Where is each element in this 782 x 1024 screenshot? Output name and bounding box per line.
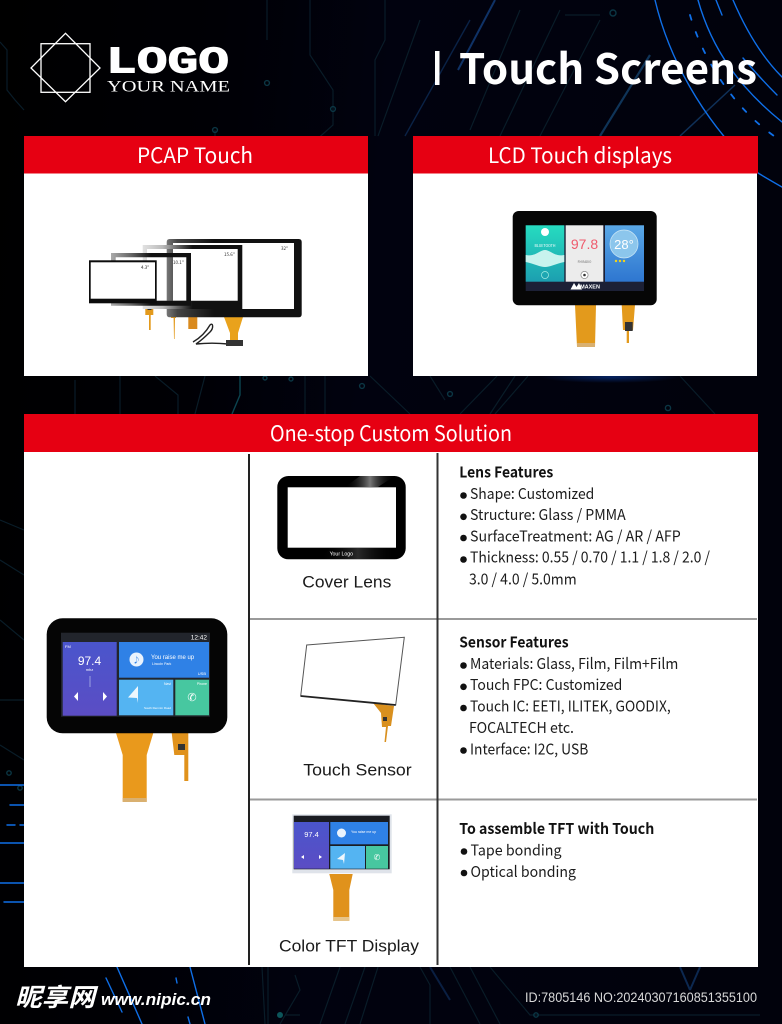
text block: Sensor Features: Touch IC: EETI, ILITEK, GOODIX, <box>470 696 671 717</box>
text block: Sensor Features: Sensor Features <box>459 631 569 652</box>
text block: Lens Features: 3.0 / 4.0 / 5.0mm <box>469 568 577 589</box>
image: touch display module: USB <box>198 671 206 676</box>
image: LCD module <box>513 211 657 347</box>
image: LCD module: FM RADIO <box>578 260 592 264</box>
watermark: nipic <box>15 978 211 1014</box>
text block: Sensor Features <box>459 631 678 759</box>
panel: PCAP Touch <box>24 136 368 376</box>
image: touch panels: 32" <box>281 246 288 252</box>
image: color TFT display: You raise me up <box>351 830 376 834</box>
watermark: nipic: www.nipic.cn <box>101 990 211 1009</box>
text block: Sensor Features: Interface: I2C, USB <box>470 738 588 759</box>
watermark: nipic: 昵享网 <box>15 978 99 1014</box>
image: touch display module <box>47 618 227 802</box>
image: touch display module: 97.4 <box>78 654 102 668</box>
panel: LCD Touch displays <box>413 136 758 376</box>
image: touch display module: FM <box>65 644 71 649</box>
label: Touch Sensor: Touch Sensor <box>303 761 412 780</box>
label: Cover Lens: Cover Lens <box>302 573 391 592</box>
image: touch display module: South Renmin Road <box>144 706 171 710</box>
image: cover lens: Your Logo <box>330 552 353 558</box>
text block: Lens Features <box>459 461 710 589</box>
image: touch display module: You raise me up <box>151 655 195 661</box>
image: LCD module: 28° <box>614 237 634 252</box>
image: LCD module: 97.8 <box>571 236 598 252</box>
label: Color TFT Display: Color TFT Display <box>279 937 420 956</box>
logo mark <box>31 33 100 102</box>
image: touch panels: 10.1" <box>173 260 184 266</box>
text block: assembly: To assemble TFT with Touch <box>459 818 654 839</box>
text block: Sensor Features: FOCALTECH etc. <box>469 717 574 738</box>
image: color TFT display <box>292 814 392 921</box>
title: Touch Screens <box>459 36 757 97</box>
text block: Lens Features: Lens Features <box>459 461 553 482</box>
logo word: LOGO <box>106 41 229 84</box>
text block: Lens Features: Shape: Customized <box>470 483 594 504</box>
text block: Lens Features: Thickness: 0.55 / 0.70 / 1.1 / 1.8 / 2.0 / <box>470 547 710 568</box>
image: touch panels: 15.6" <box>224 252 235 258</box>
image: color TFT display: ✆ <box>374 852 381 863</box>
image: touch display module: mhz <box>86 667 93 672</box>
image: touch display module: Phone <box>197 682 207 686</box>
logo name: YOUR NAME <box>107 78 230 96</box>
image: touch sensor <box>301 637 404 742</box>
text block: Sensor Features: Materials: Glass, Film, Film+Film <box>470 653 678 674</box>
heading: LCD Touch displays: LCD Touch displays <box>488 140 672 170</box>
image: color TFT display: 97.4 <box>304 830 319 839</box>
image: touch display module: ♪ <box>132 654 140 666</box>
logo <box>31 33 230 102</box>
image: touch display module: Lincoln Park <box>152 662 172 666</box>
image: touch display module: ✆ <box>187 689 197 705</box>
image: touch panels <box>89 239 302 346</box>
text block: Lens Features: Structure: Glass / PMMA <box>470 504 627 525</box>
text block: assembly <box>459 818 654 882</box>
heading: PCAP Touch: PCAP Touch <box>137 140 253 170</box>
panel: One-stop Custom Solution <box>24 414 758 967</box>
image id: ID:7805146 NO:20240307160851355100 <box>525 989 757 1005</box>
text block: Lens Features: SurfaceTreatment: AG / AR / AFP <box>470 526 681 547</box>
image: touch display module: Navi <box>164 682 171 686</box>
text block: assembly: Optical bonding <box>470 861 576 882</box>
image: touch display module: 12:42 <box>191 634 207 642</box>
heading: One-stop Custom Solution: One-stop Custom Solution <box>270 418 512 448</box>
image: cover lens <box>277 476 406 559</box>
text block: assembly: Tape bonding <box>470 840 562 860</box>
image: touch panels: 4.3" <box>141 265 149 271</box>
image: LCD module: MAXEN <box>580 284 600 290</box>
image: LCD module: BLUETOOTH <box>535 244 556 249</box>
text block: Sensor Features: Touch FPC: Customized <box>470 674 622 695</box>
